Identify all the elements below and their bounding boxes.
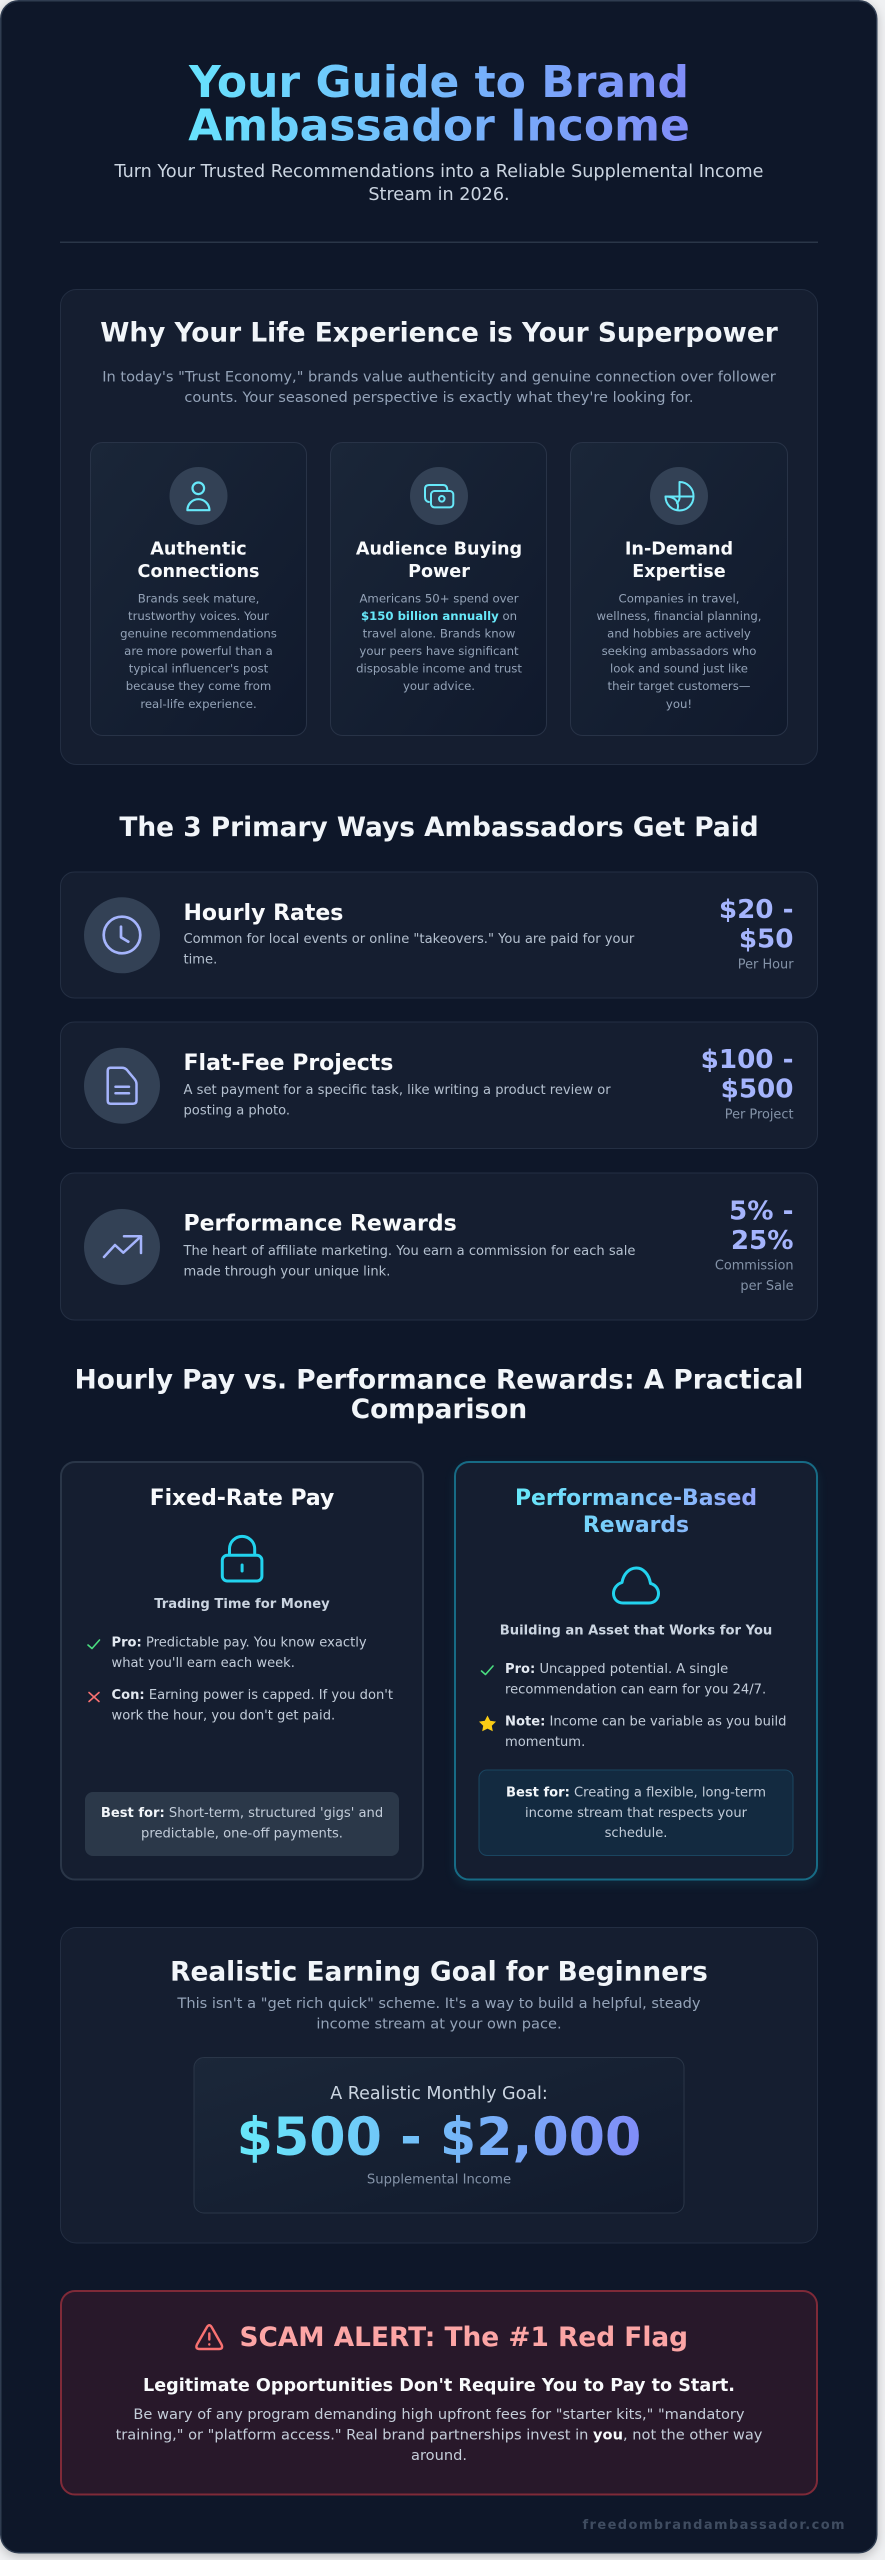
icon: document — [84, 1048, 160, 1124]
card text: you! — [666, 697, 692, 711]
icon: pie chart — [650, 467, 708, 525]
icon: money — [410, 467, 468, 525]
alert heading: SCAM ALERT: The #1 Red Flag — [240, 2322, 688, 2353]
panel intro text: counts. Your seasoned perspective is exactly what they're looking for. — [184, 389, 694, 406]
panel: fixed-rate pay — [61, 1462, 423, 1880]
pay title: Flat-Fee Projects — [184, 1051, 393, 1076]
alert text: Be wary of any program demanding high upfront fees for "starter kits," "mandatory — [133, 2406, 745, 2423]
pay card: flat-fee projects — [60, 1022, 818, 1148]
pro item: Pro: Uncapped potential. A single — [505, 1662, 728, 1677]
card text: travel alone. Brands know — [363, 626, 516, 640]
pay amount: $100 - — [701, 1045, 794, 1075]
card text: real-life experience. — [140, 697, 257, 711]
con item: work the hour, you don't get paid. — [112, 1708, 335, 1723]
pay description: Common for local events or online "takeovers." You are paid for your — [184, 932, 635, 947]
title: Your Guide to Brand — [188, 57, 689, 108]
goal box — [194, 2058, 684, 2213]
pay unit: per Sale — [740, 1279, 794, 1294]
pro item: what you'll earn each week. — [112, 1656, 295, 1671]
card text: seeking ambassadors who — [602, 644, 756, 658]
card text: because they come from — [126, 679, 271, 693]
pro item — [482, 1662, 766, 1697]
card text: $150 billion annually on — [361, 609, 517, 623]
panel heading: Realistic Earning Goal for Beginners — [170, 1956, 708, 1988]
best-for box: Best for: Short-term, structured 'gigs' and — [101, 1806, 383, 1821]
card text: look and sound just like — [610, 662, 748, 676]
goal note: Supplemental Income — [367, 2173, 511, 2188]
note item: momentum. — [505, 1735, 585, 1750]
pay unit: Per Project — [725, 1108, 794, 1122]
card text: genuine recommendations — [120, 626, 277, 640]
card heading: Audience Buying — [356, 539, 522, 559]
subtitle: Stream in 2026. — [368, 185, 510, 205]
pay title: Hourly Rates — [184, 901, 343, 926]
best-for box: income stream that respects your — [525, 1806, 748, 1821]
card: audience buying power — [330, 442, 546, 736]
card text: are more powerful than a — [124, 644, 273, 658]
pay amount: $500 — [721, 1074, 794, 1104]
goal label: A Realistic Monthly Goal: — [330, 2084, 548, 2104]
best-for box: predictable, one-off payments. — [141, 1826, 343, 1842]
pay description: posting a photo. — [184, 1104, 290, 1119]
card text: your advice. — [403, 679, 475, 693]
icon: person — [170, 467, 228, 525]
pay unit: Per Hour — [738, 957, 794, 972]
card heading: Power — [408, 562, 470, 582]
card text: their target customers— — [607, 679, 751, 693]
pay card: hourly rates — [60, 872, 818, 998]
note item — [479, 1715, 786, 1750]
icon: warning triangle — [196, 2325, 222, 2349]
panel intro text: In today's "Trust Economy," brands value authenticity and genuine connection over follower — [102, 368, 776, 386]
card text: and hobbies are actively — [607, 626, 751, 640]
pay amount: 25% — [731, 1226, 794, 1256]
card heading: Connections — [138, 562, 259, 582]
title: Ambassador Income — [188, 100, 690, 152]
alert text: around. — [411, 2447, 467, 2464]
pro item: recommendation can earn for you 24/7. — [505, 1682, 766, 1697]
card: in-demand expertise — [570, 442, 788, 736]
pay description: made through your unique link. — [184, 1264, 390, 1280]
icon: clock — [84, 897, 160, 973]
card text: your peers have significant — [359, 644, 519, 658]
footer website: freedombrandambassador.com — [582, 2518, 846, 2533]
pro item — [88, 1636, 367, 1671]
pay amount: $20 - — [719, 895, 794, 925]
pay amount: 5% - — [729, 1197, 794, 1227]
card: authentic connections — [90, 442, 306, 736]
con item — [89, 1688, 393, 1723]
panel heading: Performance-Based — [515, 1486, 757, 1511]
section heading: comparison: Comparison — [351, 1394, 527, 1425]
panel: scam alert — [61, 2291, 817, 2494]
panel heading: Rewards — [583, 1513, 689, 1538]
section heading: ways to get paid: The 3 Primary Ways Ambassadors Get Paid — [119, 812, 759, 843]
best-for box: schedule. — [605, 1826, 667, 1841]
header — [114, 57, 763, 205]
panel: performance-based rewards — [455, 1462, 817, 1880]
pay description: time. — [184, 953, 217, 968]
panel intro text: income stream at your own pace. — [316, 2016, 562, 2033]
best-for box — [479, 1770, 793, 1856]
panel heading: Why Your Life Experience is Your Superpower — [100, 318, 778, 348]
alert text: training," or "platform access." Real brand partnerships invest in you, not the other way — [116, 2426, 762, 2443]
subtitle: Turn Your Trusted Recommendations into a Reliable Supplemental Income — [114, 162, 763, 182]
best-for box — [85, 1792, 399, 1856]
alert subheading: Legitimate Opportunities Don't Require You to Pay to Start. — [143, 2376, 735, 2396]
icon: trending up — [84, 1209, 160, 1285]
card heading: Expertise — [632, 562, 726, 582]
card text: trustworthy voices. Your — [128, 609, 269, 623]
icon: lock — [222, 1536, 262, 1581]
panel: life experience superpower — [60, 290, 818, 764]
panel intro text: This isn't a "get rich quick" scheme. It's a way to build a helpful, steady — [176, 1995, 701, 2012]
card text: disposable income and trust — [356, 662, 522, 676]
pay title: Performance Rewards — [184, 1212, 457, 1237]
card text: Brands seek mature, — [138, 591, 259, 605]
panel: realistic earning goal — [60, 1928, 818, 2243]
icon: cloud — [614, 1568, 658, 1603]
goal amount: $500 - $2,000 — [237, 2108, 641, 2168]
card heading: Authentic — [150, 539, 247, 559]
pay description: A set payment for a specific task, like writing a product review or — [184, 1083, 611, 1098]
panel subheading: Trading Time for Money — [154, 1597, 330, 1612]
con item: Con: Earning power is capped. If you don't — [112, 1688, 393, 1703]
section heading: comparison: Hourly Pay vs. Performance Rewards: A Practical — [75, 1365, 803, 1396]
card text: typical influencer's post — [129, 662, 269, 676]
pro item: Pro: Predictable pay. You know exactly — [112, 1636, 367, 1651]
panel heading: Fixed-Rate Pay — [150, 1486, 334, 1511]
panel subheading: Building an Asset that Works for You — [500, 1624, 772, 1638]
card heading: In-Demand — [625, 539, 733, 559]
best-for box: Best for: Creating a flexible, long-term — [506, 1785, 766, 1800]
card text: Americans 50+ spend over — [359, 591, 519, 605]
pay amount: $50 — [739, 924, 794, 954]
pay card: performance rewards — [60, 1173, 818, 1320]
pay description: The heart of affiliate marketing. You earn a commission for each sale — [182, 1244, 635, 1259]
note item: Note: Income can be variable as you build — [505, 1715, 786, 1730]
card text: wellness, financial planning, — [596, 609, 762, 623]
pay unit: Commission — [715, 1259, 794, 1274]
card text: Companies in travel, — [619, 591, 739, 605]
